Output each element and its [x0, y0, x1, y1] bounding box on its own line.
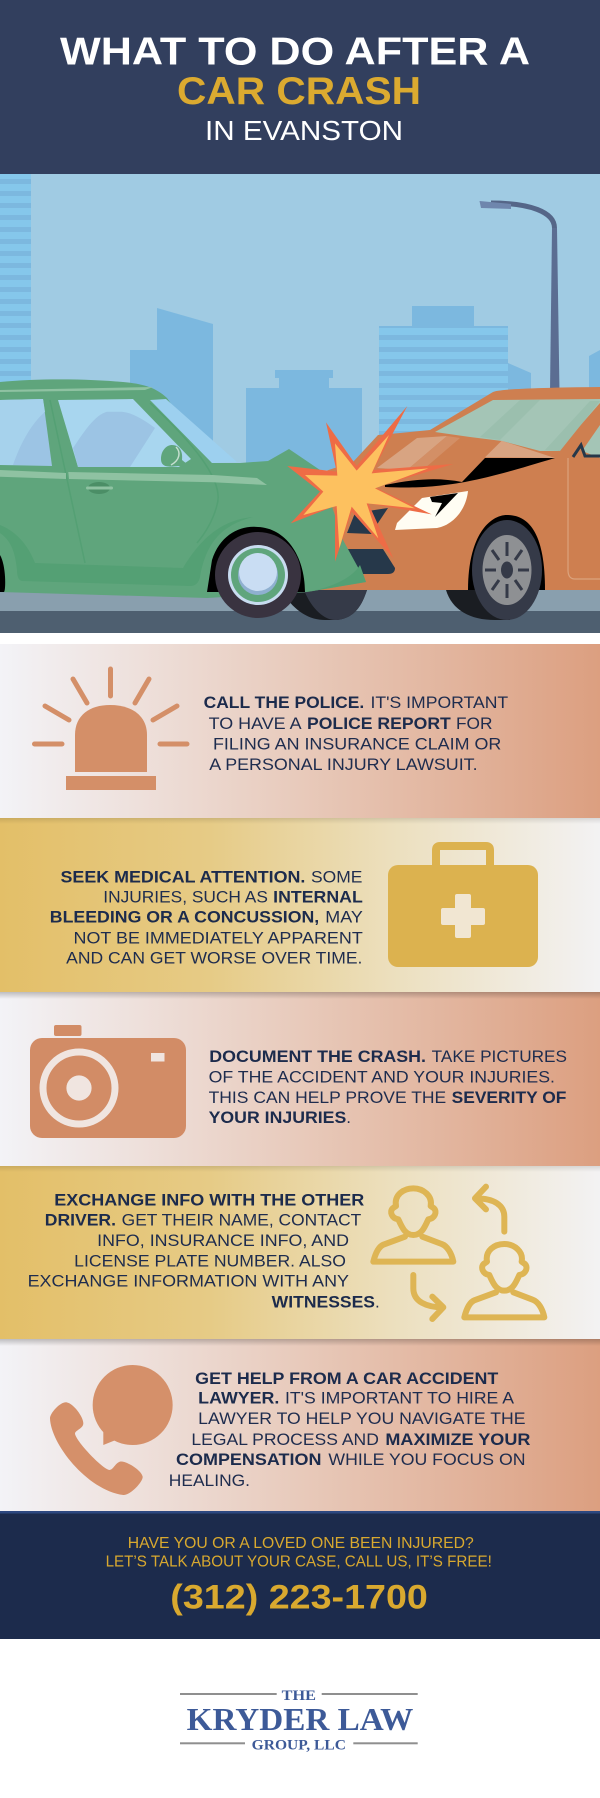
call to action text: [106, 1535, 492, 1571]
side mirror: [161, 445, 192, 468]
text: get help from a lawyer: WHILE YOU FOCUS ON: [328, 1450, 526, 1469]
text: exchange info: WITNESSES: [272, 1293, 375, 1312]
crash starburst: [287, 406, 453, 562]
text: document the crash: .: [346, 1108, 351, 1127]
hood highlight: [377, 436, 447, 470]
text: seek medical attention: SEEK MEDICAL ATTENTION.: [60, 867, 305, 886]
text: get help from a lawyer: LAWYER.: [198, 1389, 279, 1408]
text: document the crash: TAKE PICTURES: [432, 1047, 567, 1066]
windshield: [150, 399, 237, 463]
text: get help from a lawyer: GET HELP FROM A CAR ACCIDENT: [195, 1369, 499, 1388]
arrow: up and left: [475, 1187, 504, 1232]
front side window: [58, 399, 191, 467]
top shadow: [0, 1166, 600, 1172]
text: call the police: A PERSONAL INJURY LAWSUIT.: [209, 755, 478, 774]
text: document the crash: [209, 1047, 567, 1127]
orange car body: [298, 387, 600, 590]
street lamp: [480, 201, 560, 392]
top shadow: [0, 1339, 600, 1346]
road: [0, 588, 600, 633]
orange car wheel: [468, 515, 545, 590]
text: call the police: [204, 693, 508, 774]
panel: seek medical attention: [0, 818, 600, 992]
green car: [0, 379, 367, 620]
text: seek medical attention: SOME: [311, 867, 362, 886]
text: get help from a lawyer: COMPENSATION: [176, 1450, 322, 1469]
text: call the police: TO HAVE A: [209, 714, 302, 733]
title line: car crash: CAR CRASH: [177, 70, 421, 113]
text: document the crash: THIS CAN HELP PROVE THE: [209, 1088, 446, 1107]
icon: siren: [34, 669, 187, 790]
panel: call the police: [0, 644, 600, 818]
orange car windshield: [435, 399, 600, 451]
text: exchange info: EXCHANGE INFORMATION WITH ANY: [28, 1272, 349, 1291]
text: call the police: FILING AN INSURANCE CLAIM OR: [213, 734, 501, 754]
text: get help from a lawyer: MAXIMIZE YOUR: [385, 1430, 530, 1449]
text: call the police: CALL THE POLICE.: [204, 693, 364, 712]
logo: the kryder law group: GROUP, LLC: [252, 1737, 346, 1753]
top shadow: [0, 992, 600, 999]
panel: get help from a lawyer: [0, 1339, 600, 1512]
call to action text: HAVE YOU OR A LOVED ONE BEEN INJURED?: [128, 1535, 474, 1552]
rear wheel arch: [0, 555, 5, 592]
front fender shading: [307, 565, 366, 592]
orange car: [298, 387, 600, 620]
text: get help from a lawyer: LEGAL PROCESS AND: [191, 1430, 379, 1449]
text: exchange info: LICENSE PLATE NUMBER. ALSO: [74, 1252, 346, 1271]
logo: the kryder law group: KRYDER LAW: [187, 1701, 413, 1737]
subtitle: in evanston: IN EVANSTON: [205, 115, 403, 146]
call to action text: LET’S TALK ABOUT YOUR CASE, CALL US, IT’S FREE!: [106, 1554, 492, 1571]
text: document the crash: YOUR INJURIES: [209, 1108, 346, 1127]
logo: the kryder law group: [180, 1688, 418, 1753]
icon: phone and speech bubble: [50, 1365, 173, 1495]
hood crack: [385, 458, 555, 487]
icon: exchanging information between two people: [373, 1187, 544, 1319]
text: seek medical attention: MAY: [325, 908, 363, 927]
text: get help from a lawyer: IT'S IMPORTANT TO HIRE A: [285, 1389, 515, 1408]
icon: camera: [30, 1025, 186, 1138]
text: get help from a lawyer: [169, 1369, 530, 1490]
person two: [464, 1244, 544, 1317]
text: exchange info: EXCHANGE INFO WITH THE OTHER: [54, 1191, 364, 1210]
text: get help from a lawyer: LAWYER TO HELP YOU NAVIGATE THE: [198, 1409, 525, 1428]
arrow: down and right: [413, 1275, 443, 1319]
text: document the crash: SEVERITY OF: [452, 1088, 566, 1107]
text: exchange info: GET THEIR NAME, CONTACT: [122, 1211, 361, 1230]
text: document the crash: OF THE ACCIDENT AND YOUR INJURIES.: [209, 1068, 555, 1086]
rear side window: [0, 399, 52, 466]
text: seek medical attention: BLEEDING OR A CONCUSSION,: [50, 908, 319, 927]
text: seek medical attention: INJURIES, SUCH AS: [103, 888, 268, 907]
crash illustration scene: [0, 174, 600, 633]
city skyline: [0, 174, 600, 470]
text: seek medical attention: [50, 867, 363, 967]
text: exchange info: INFO, INSURANCE INFO, AND: [97, 1231, 349, 1250]
text: call the police: POLICE REPORT: [307, 714, 451, 733]
text: exchange info: .: [375, 1293, 380, 1312]
call to action footer: [0, 1511, 600, 1639]
text: seek medical attention: NOT BE IMMEDIATELY APPARENT: [74, 928, 363, 947]
logo: the kryder law group: THE: [282, 1688, 316, 1704]
rear tyre behind green car: [283, 590, 367, 620]
green car panel shading: [0, 517, 253, 586]
title line: what to do after a: WHAT TO DO AFTER A: [60, 30, 530, 74]
front grille and bumper: [347, 508, 388, 534]
text: exchange info: [28, 1191, 380, 1312]
top shadow: [0, 818, 600, 824]
panel: document the crash: [0, 992, 600, 1166]
person one: [373, 1188, 453, 1262]
text: call the police: IT'S IMPORTANT: [370, 693, 508, 712]
text: get help from a lawyer: HEALING.: [169, 1471, 250, 1490]
text: call the police: FOR: [456, 714, 492, 733]
text: document the crash: DOCUMENT THE CRASH.: [209, 1047, 426, 1066]
door handle: [88, 482, 110, 494]
text: exchange info: DRIVER.: [45, 1211, 116, 1230]
green car wheel: [207, 527, 305, 592]
green car body: [0, 379, 366, 598]
headlight: [395, 491, 468, 530]
orange car rear tyre shadow: [446, 590, 510, 620]
chrome trim strips: [0, 470, 267, 485]
text: seek medical attention: INTERNAL: [273, 888, 363, 907]
header banner: [0, 0, 600, 174]
icon: medical kit: [388, 846, 538, 967]
panel: exchange info: [0, 1166, 600, 1339]
door line: [568, 458, 600, 579]
phone number: (312) 223-1700: [170, 1578, 428, 1616]
text: seek medical attention: AND CAN GET WORSE OVER TIME.: [66, 948, 362, 967]
